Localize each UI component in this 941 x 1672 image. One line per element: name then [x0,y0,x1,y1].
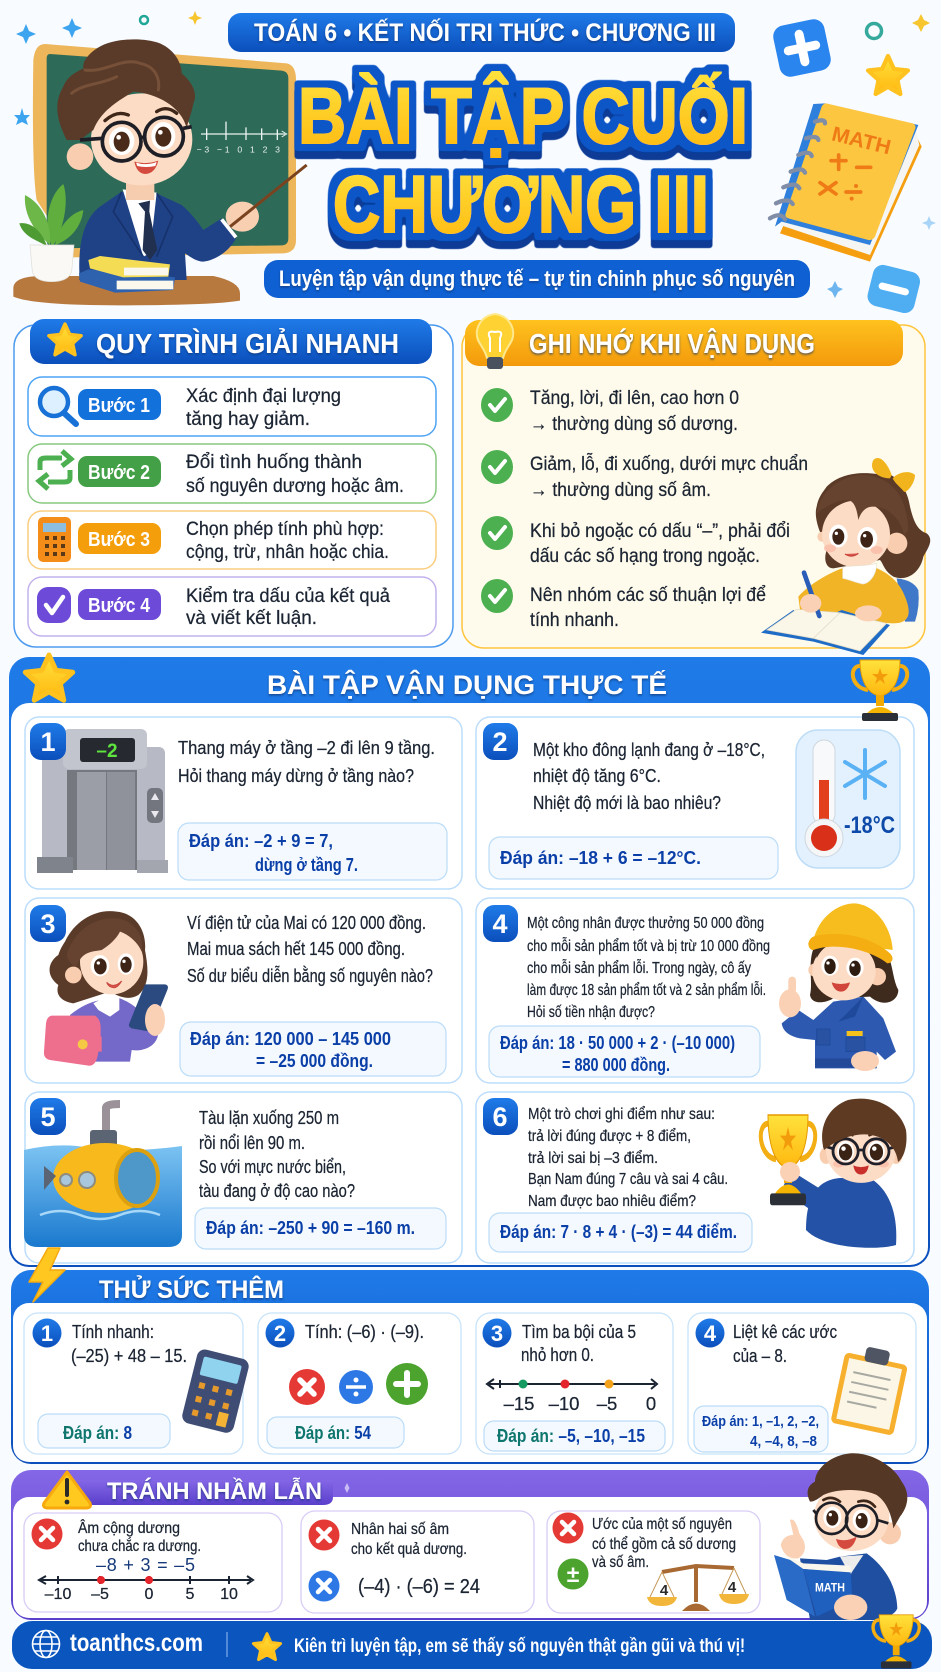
number badge [30,905,66,942]
heading: THỬ SỨC THÊM [99,1274,284,1304]
icon: calculator [181,1348,250,1434]
exercise 1: Thang máy ở tầng –2 đi lên 9 tầng. [178,737,435,758]
challenge 3 [476,1313,673,1454]
number badge: 1 [41,1321,53,1346]
memory items: Giảm, lỗ, đi xuống, dưới mực chuẩn [530,452,808,475]
heading: BÀI TẬP VẬN DỤNG THỰC TẾ [267,669,667,700]
number badge: 2 [492,727,508,757]
challenge 1: Tính nhanh: [72,1321,154,1342]
answer [267,1417,404,1448]
section: bài tập vận dụng thực tế [9,655,930,1267]
exercise 3: Mai mua sách hết 145 000 đồng. [187,938,405,959]
exercise 4: Một công nhân được thưởng 50 000 đồng [527,915,764,932]
icon: math notebook: MATH [829,123,893,159]
icon: submarine [24,1104,182,1247]
exercise 6: Bạn Nam đúng 7 câu và sai 4 câu. [528,1171,728,1188]
mistake 3: và số âm. [592,1554,649,1571]
answer: Đáp án: –5, –10, –15 [497,1425,645,1446]
challenge 3: Tìm ba bội của 5 [522,1321,636,1342]
answer [484,1421,665,1451]
step 3: cộng, trừ, nhân hoặc chia. [186,541,389,563]
step 2: Đổi tình huống thành [186,451,362,473]
step 2: Bước 2 [88,462,150,484]
number badge [30,723,66,760]
exercise 1: Hỏi thang máy dừng ở tầng nào? [178,765,414,786]
footer: Kiên trì luyện tập, em sẽ thấy số nguyên thật gần gũi và thú vị! [294,1635,745,1657]
panel: quy trình giải nhanh [14,319,453,647]
character: teacher [57,39,307,280]
number line: 10 [220,1586,238,1603]
number line: 5 [186,1586,195,1603]
challenge 2: Tính: (–6) · (–9). [305,1321,424,1342]
icon: chalkboard [33,44,296,257]
challenge 4: Liệt kê các ước [733,1321,837,1342]
exercise 4: làm được 18 sản phẩm tốt và 2 sản phẩm lỗi. [527,980,766,999]
memory items: → thường dùng số dương. [530,413,738,435]
exercise 5: tàu đang ở độ cao nào? [199,1180,355,1201]
exercise 4 [476,898,914,1083]
number badge [483,905,518,942]
mistake 2: (–4) · (–6) = 24 [358,1576,480,1598]
step 2 [28,444,436,503]
icon: math notebook [770,103,922,262]
footer [12,1621,932,1669]
mistake 1: chưa chắc ra dương. [78,1536,201,1555]
exercise 4: cho mỗi sản phẩm tốt và bị trừ 10 000 đồng [527,936,770,955]
number line [487,1379,657,1414]
memory items [481,387,808,631]
icon: balance scale: 4 [728,1579,737,1596]
number badge [266,1318,294,1348]
step 1 [28,377,436,436]
number badge: 4 [704,1321,717,1346]
step 1: Bước 1 [88,395,150,417]
step 1: Xác định đại lượng [186,385,341,407]
icon: star [25,655,73,700]
answer [180,1022,446,1076]
wooden table [13,276,240,305]
answer [489,837,778,879]
mistake 2: cho kết quả dương. [351,1541,467,1558]
step 4 [28,577,436,636]
icon: books [79,256,175,293]
step 3: Chọn phép tính phù hợp: [186,518,384,540]
step 4: Kiểm tra dấu của kết quả [186,585,390,607]
number line: 0 [145,1586,154,1603]
mistake 3: ± [567,1561,580,1587]
memory items: tính nhanh. [530,609,619,631]
title: BÀI TẬP CUỐI [298,71,748,160]
mistake 1: –8 + 3 = –5 [96,1555,195,1575]
decorative sparkles [14,11,936,298]
answer: 4, –4, 8, –8 [750,1433,817,1450]
top tag: TOÁN 6 • KẾT NỐI TRI THỨC • CHƯƠNG III [254,17,716,47]
number line: –10 [549,1393,579,1414]
exercise 3: Số dư biểu diễn bằng số nguyên nào? [187,965,433,986]
number badge: 3 [491,1321,503,1346]
number badge: 2 [274,1321,286,1346]
memory items: → thường dùng số âm. [530,479,711,501]
icon: star [868,56,908,94]
footer: toanthcs.com [70,1629,203,1657]
icon: balance scale: 4 [660,1582,669,1599]
mistake 3: Ước của một số nguyên [592,1516,732,1533]
answer: Đáp án: 54 [295,1422,372,1443]
number badge [32,1318,62,1348]
character: boy with math book: MATH [815,1581,845,1595]
number line: 0 [646,1393,656,1414]
exercise 3 [25,898,462,1083]
icon: elevator: –2 [96,741,118,762]
mistake 2: Nhân hai số âm [351,1521,449,1538]
top tag [228,13,735,52]
number badge [696,1318,724,1348]
answer: Đáp án: –18 + 6 = –12°C. [500,847,701,868]
answer: Đáp án: –2 + 9 = 7, [189,830,333,851]
icon: lightning bolt [29,1248,65,1302]
answer [178,823,447,880]
number badge: 5 [40,1102,56,1132]
character: Mai with phone and wallet [44,911,168,1066]
mistake 2 [301,1511,534,1613]
exercise 6: Một trò chơi ghi điểm như sau: [528,1105,715,1123]
challenge 4 [688,1313,916,1454]
answer: Đáp án: 18 · 50 000 + 2 · (–10 000) [500,1032,735,1053]
number badge: 1 [40,727,56,757]
number line: –10 [45,1586,71,1603]
exercise 5: rồi nổi lên 90 m. [199,1132,305,1153]
number line: –5 [91,1586,109,1603]
answer: Đáp án: 7 · 8 + 4 · (–3) = 44 điểm. [500,1221,737,1242]
panel: ghi nhớ khi vận dụng [462,314,930,655]
heading [465,320,903,366]
memory items: dấu các số hạng trong ngoặc. [530,545,760,567]
number line [39,1576,253,1603]
icon: clipboard [830,1342,910,1436]
memory items: Khi bỏ ngoặc có dấu “–”, phải đổi [530,520,790,542]
exercise 1 [25,717,462,889]
icon: globe [32,1630,60,1658]
step 3: Bước 3 [88,529,150,551]
exercise 5: So với mực nước biển, [199,1156,346,1177]
character: worker [779,903,898,1071]
icon: balance scale [647,1566,749,1611]
step 4: và viết kết luận. [186,607,317,629]
character: girl writing [761,458,930,655]
exercise 5 [24,1092,462,1263]
memory items: Nên nhóm các số thuận lợi để [530,584,766,606]
answer: Đáp án: 120 000 – 145 000 [190,1028,391,1049]
icons: operations [289,1363,428,1405]
number line: –15 [504,1393,534,1414]
mistake 1: Âm cộng dương [78,1518,180,1537]
number badge [483,723,518,760]
number badge [482,1318,512,1348]
exercise 4: cho mỗi sản phẩm lỗi. Trong ngày, cô ấy [527,958,751,977]
answer: Đáp án: 8 [63,1422,132,1443]
step 3 [28,511,436,569]
icon: elevator [37,729,168,873]
icon: warning triangle [44,1472,90,1508]
answer [694,1406,828,1452]
challenge 1 [24,1313,250,1454]
exercise 5: Tàu lặn xuống 250 m [199,1107,339,1128]
icon: light bulb [477,314,513,369]
exercise 2: Nhiệt độ mới là bao nhiêu? [533,792,721,813]
exercise 6: Nam được bao nhiêu điểm? [528,1192,696,1210]
heading [30,319,432,364]
answer [195,1208,446,1249]
exercise 6: trả lời đúng được + 8 điểm, [528,1127,691,1145]
title: CHƯƠNG III [333,160,709,250]
icon: thermometer tile [796,730,900,868]
answer [38,1414,170,1448]
icon: trophy [853,660,907,721]
exercise 3: Ví điện tử của Mai có 120 000 đồng. [187,912,426,933]
answer: = 880 000 đồng. [562,1054,670,1075]
mistake 3 [547,1511,760,1613]
step 2: số nguyên dương hoặc âm. [186,475,404,497]
heading: TRÁNH NHẦM LẪN [107,1476,322,1505]
exercise 4: Hỏi số tiền nhận được? [527,1004,655,1021]
mistake 1 [24,1513,282,1612]
challenge 3: nhỏ hơn 0. [521,1344,594,1365]
heading: GHI NHỚ KHI VẬN DỤNG [529,328,815,359]
number badge [483,1098,518,1135]
icon: minus tile [865,263,922,315]
challenge 2 [258,1313,461,1454]
exercise 6: trả lời sai bị –3 điểm. [528,1149,658,1167]
exercise 2: nhiệt độ tăng 6°C. [533,765,661,786]
answer: dừng ở tầng 7. [255,854,358,875]
step 1: tăng hay giảm. [186,408,310,430]
answer [489,1026,760,1077]
teacher scene [13,39,307,305]
icon: footer trophy [873,1615,919,1668]
mistake 3: có thể gồm cả số dương [592,1535,736,1553]
heading: QUY TRÌNH GIẢI NHANH [96,327,399,359]
section: thử sức thêm [11,1248,929,1464]
subtitle [264,260,810,298]
answer: Đáp án: 1, –1, 2, –2, [702,1413,819,1430]
challenge 4: của – 8. [733,1345,787,1366]
title [298,71,748,250]
icon: thermometer tile: -18°C [844,812,895,839]
exercise 2: Một kho đông lạnh đang ở –18°C, [533,739,765,760]
character: boy with math book [774,1453,907,1620]
number badge: 6 [492,1102,508,1132]
subtitle: Luyện tập vận dụng thực tế – tự tin chinh phục số nguyên [279,266,795,291]
header banner [13,11,936,315]
number badge: 3 [40,909,56,939]
icon: star [253,1634,281,1660]
answer [489,1213,752,1252]
challenge 1: (–25) + 48 – 15. [71,1345,187,1366]
answer: = –25 000 đồng. [256,1050,373,1071]
answer: Đáp án: –250 + 90 = –160 m. [206,1217,415,1238]
number badge: 4 [492,909,508,939]
exercise 2 [476,717,914,889]
number badge [30,1098,66,1135]
character: Nam with trophy [761,1099,907,1248]
step 4: Bước 4 [88,595,151,617]
icon: chalkboard: −3 −1 0 1 2 3 [197,145,280,155]
section: tránh nhầm lẫn [11,1453,929,1620]
memory items: Tăng, lời, đi lên, cao hơn 0 [530,387,739,409]
exercise 6 [476,1092,914,1263]
icon: plant [19,184,83,282]
number line: –5 [597,1393,617,1414]
icon: plus tile [771,17,833,79]
